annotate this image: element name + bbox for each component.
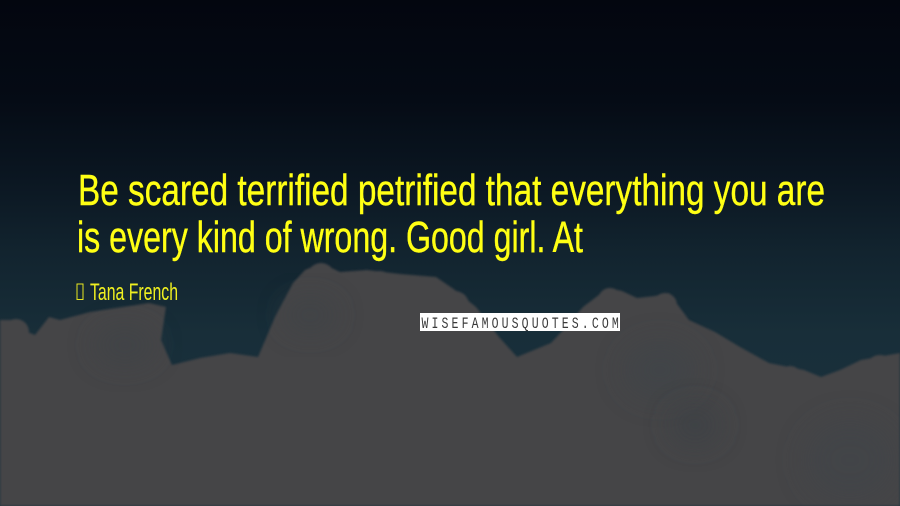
icon: missing glyph box bbox=[77, 284, 83, 300]
watermark text: WISEFAMOUSQUOTES.COM bbox=[422, 315, 619, 334]
quote text bbox=[77, 166, 825, 262]
quote line 2: is every kind of wrong. Good girl. At bbox=[77, 213, 583, 262]
author name: Tana French bbox=[90, 279, 178, 306]
author attribution bbox=[77, 279, 178, 306]
watermark badge bbox=[420, 313, 620, 334]
clouds bbox=[0, 263, 900, 506]
